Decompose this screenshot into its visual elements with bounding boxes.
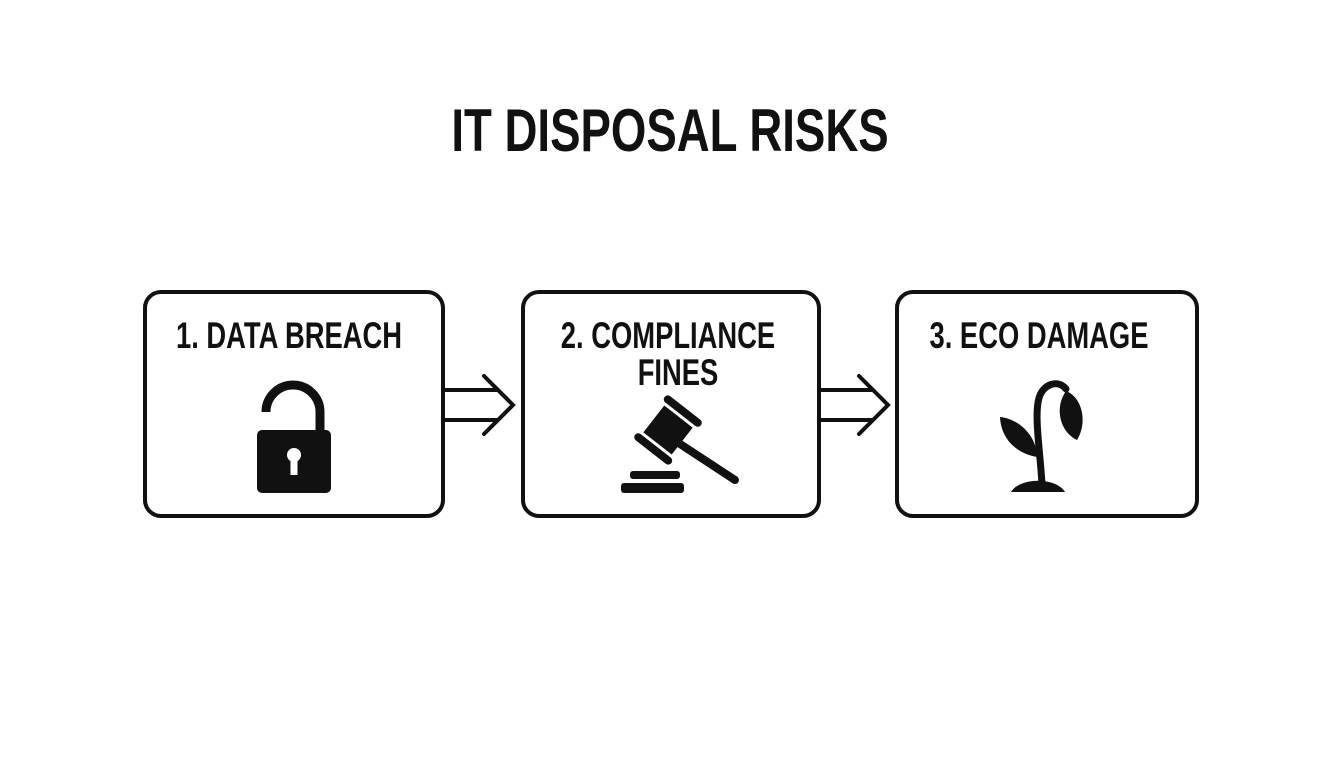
arrow: 1 to 2 [443, 376, 513, 434]
panel: eco damage [897, 292, 1197, 516]
icon: open padlock [257, 385, 331, 493]
panel: compliance fines [523, 292, 819, 516]
heading: compliance fines: 2. COMPLIANCE [561, 315, 775, 356]
icon: gavel [621, 394, 735, 493]
icon: wilting plant [1000, 384, 1083, 492]
heading: eco damage: 3. ECO DAMAGE [930, 315, 1148, 356]
heading: compliance fines: FINES [638, 352, 718, 393]
heading: compliance fines [561, 315, 775, 393]
arrow: 2 to 3 [819, 376, 888, 434]
title: IT DISPOSAL RISKS [451, 98, 889, 165]
heading: data breach: 1. DATA BREACH [176, 315, 402, 356]
panel: data breach [145, 292, 443, 516]
